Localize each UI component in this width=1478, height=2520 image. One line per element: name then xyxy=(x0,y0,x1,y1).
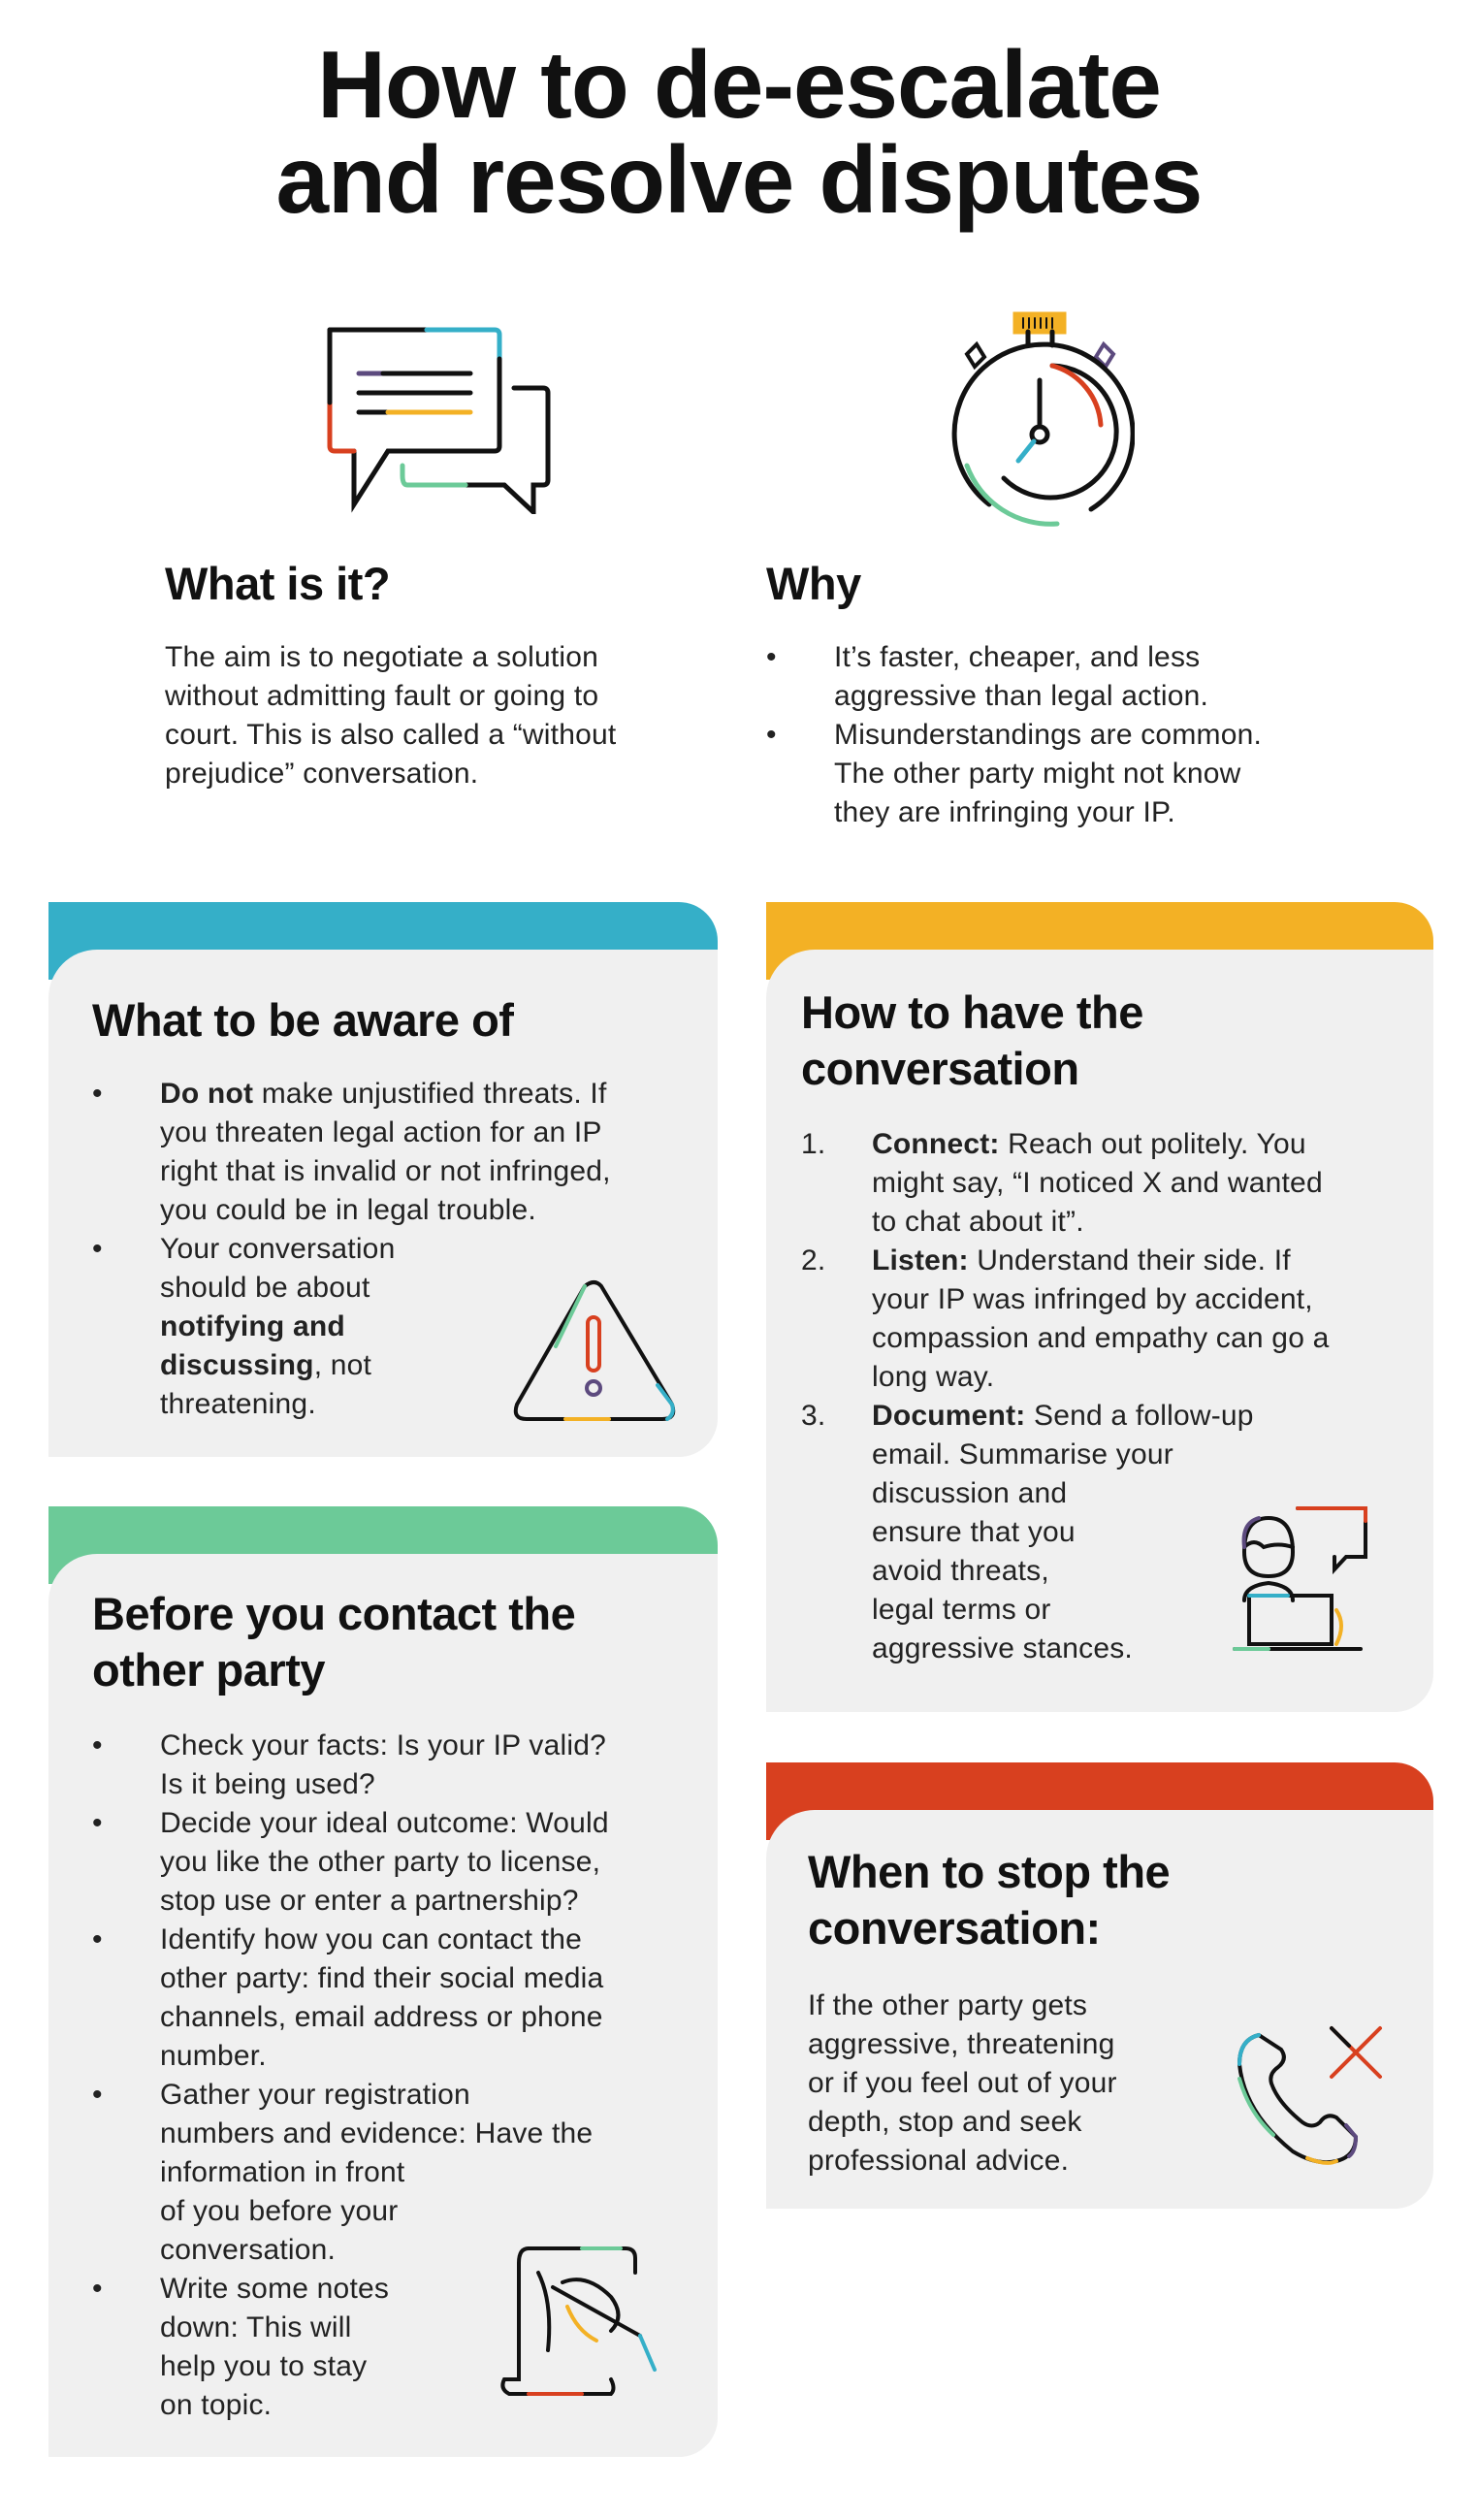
text: what is it xyxy=(165,641,616,790)
list: you like the other party to license, xyxy=(160,1846,600,1878)
list: 2. xyxy=(801,1244,825,1276)
list: information in front xyxy=(160,2156,404,2188)
list: to chat about it”. xyxy=(872,1206,1084,1238)
list xyxy=(92,1078,611,1420)
list: legal terms or xyxy=(872,1594,1051,1626)
list: you could be in legal trouble. xyxy=(160,1194,536,1226)
text: what is it: prejudice” conversation. xyxy=(165,758,478,790)
list: numbers and evidence: Have the xyxy=(160,2117,593,2149)
list: discussing, not xyxy=(160,1349,371,1381)
title: and resolve disputes xyxy=(276,126,1202,233)
panel: what to be aware of xyxy=(48,902,718,1457)
panel: how to have the conversation xyxy=(766,902,1433,1712)
text: depth, stop and seek xyxy=(808,2106,1082,2138)
list: your IP was infringed by accident, xyxy=(872,1283,1313,1315)
icon: warning triangle xyxy=(514,1280,675,1422)
list: why xyxy=(766,641,1262,828)
list: long way. xyxy=(872,1361,994,1393)
text: aggressive, threatening xyxy=(808,2028,1114,2060)
list: compassion and empathy can go a xyxy=(872,1322,1329,1354)
list: email. Summarise your xyxy=(872,1438,1173,1470)
list: Document: Send a follow-up xyxy=(872,1400,1254,1432)
list: should be about xyxy=(160,1272,370,1304)
list: aggressive stances. xyxy=(872,1632,1133,1664)
list xyxy=(801,1128,1329,1664)
title: How to de-escalate xyxy=(317,31,1161,138)
list: why: • xyxy=(766,641,777,673)
list: on topic. xyxy=(160,2389,272,2421)
list: avoid threats, xyxy=(872,1555,1049,1587)
heading: What to be aware of xyxy=(92,994,513,1046)
icon: stopwatch xyxy=(952,312,1135,527)
list: of you before your xyxy=(160,2195,398,2227)
list: Decide your ideal outcome: Would xyxy=(160,1807,609,1839)
title xyxy=(276,31,1202,233)
list: • xyxy=(92,1233,103,1265)
text: what is it: court. This is also called a “without xyxy=(165,719,616,751)
icon: chat bubbles xyxy=(328,328,551,514)
list: other party: find their social media xyxy=(160,1962,603,1994)
list: number. xyxy=(160,2040,267,2072)
heading: conversation xyxy=(801,1043,1079,1094)
list: 3. xyxy=(801,1400,825,1432)
heading: Before you contact the xyxy=(92,1588,575,1639)
text: what is it: The aim is to negotiate a solution xyxy=(165,641,598,673)
list: threatening. xyxy=(160,1388,316,1420)
list: • xyxy=(92,1078,103,1110)
heading: conversation: xyxy=(808,1902,1101,1954)
list: 1. xyxy=(801,1128,825,1160)
list: Identify how you can contact the xyxy=(160,1923,582,1955)
list: Is it being used? xyxy=(160,1768,375,1800)
list: why: It’s faster, cheaper, and less xyxy=(834,641,1200,673)
list: why: • xyxy=(766,719,777,751)
list: • xyxy=(92,1923,103,1955)
list: might say, “I noticed X and wanted xyxy=(872,1167,1323,1199)
list: notifying and xyxy=(160,1310,345,1342)
text: If the other party gets xyxy=(808,1989,1087,2021)
list: Write some notes xyxy=(160,2273,389,2305)
text: professional advice. xyxy=(808,2145,1069,2177)
list: Gather your registration xyxy=(160,2079,470,2111)
list: Connect: Reach out politely. You xyxy=(872,1128,1306,1160)
heading: why: Why xyxy=(766,558,861,609)
text: or if you feel out of your xyxy=(808,2067,1117,2099)
list: why: aggressive than legal action. xyxy=(834,680,1208,712)
list xyxy=(92,1729,609,2421)
list: down: This will xyxy=(160,2311,352,2343)
heading: When to stop the xyxy=(808,1846,1170,1897)
list: Listen: Understand their side. If xyxy=(872,1244,1291,1276)
list: ensure that you xyxy=(872,1516,1076,1548)
list: why: The other party might not know xyxy=(834,758,1241,790)
list: stop use or enter a partnership? xyxy=(160,1885,579,1917)
list: Do not make unjustified threats. If xyxy=(160,1078,606,1110)
list: you threaten legal action for an IP xyxy=(160,1116,602,1148)
text: what is it: without admitting fault or going to xyxy=(165,680,598,712)
list: right that is invalid or not infringed, xyxy=(160,1155,611,1187)
list: help you to stay xyxy=(160,2350,367,2382)
panel: before you contact the other party xyxy=(48,1506,718,2457)
list: Check your facts: Is your IP valid? xyxy=(160,1729,606,1761)
icon: hand writing notes xyxy=(500,2246,658,2396)
list: channels, email address or phone xyxy=(160,2001,603,2033)
heading xyxy=(801,986,1143,1094)
list: • xyxy=(92,2273,103,2305)
heading: what is it: What is it? xyxy=(165,558,390,609)
heading xyxy=(808,1846,1170,1954)
list: • xyxy=(92,2079,103,2111)
heading xyxy=(92,1588,575,1696)
list: conversation. xyxy=(160,2234,336,2266)
heading: How to have the xyxy=(801,986,1143,1038)
text xyxy=(808,1989,1117,2177)
list: discussion and xyxy=(872,1477,1067,1509)
list: Your conversation xyxy=(160,1233,395,1265)
icon: phone with cross xyxy=(1237,2025,1383,2165)
heading: other party xyxy=(92,1644,325,1696)
list: why: Misunderstandings are common. xyxy=(834,719,1262,751)
panel: when to stop the conversation xyxy=(766,1762,1433,2209)
list: why: they are infringing your IP. xyxy=(834,796,1175,828)
icon: person with laptop and speech bubble xyxy=(1233,1506,1367,1651)
list: • xyxy=(92,1729,103,1761)
list: • xyxy=(92,1807,103,1839)
